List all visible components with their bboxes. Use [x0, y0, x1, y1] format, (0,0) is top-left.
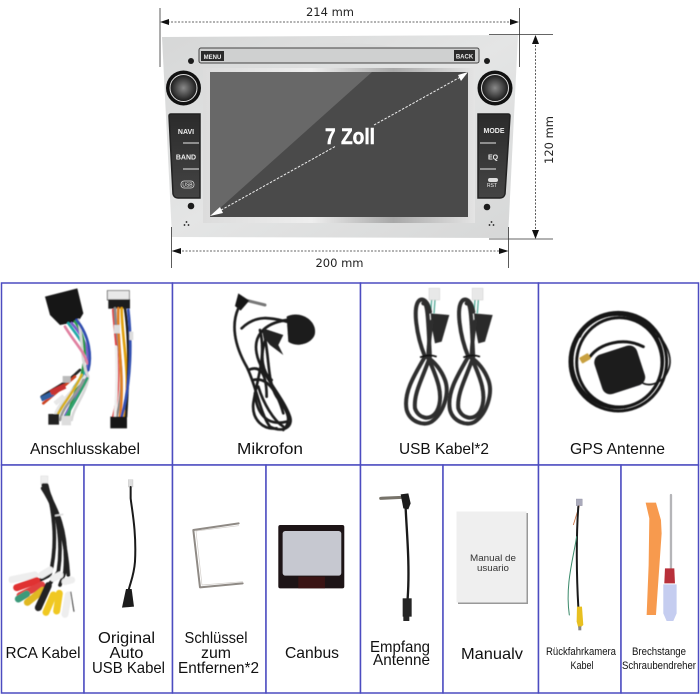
- left button panel: USB: [182, 182, 193, 188]
- screen: [210, 72, 468, 217]
- icon: RCA cable: [12, 476, 74, 614]
- icon: receiver antenna adapter: [381, 493, 412, 621]
- label: Entfernen*2: [178, 660, 259, 677]
- icon: canbus module: [278, 525, 344, 588]
- label: RCA Kabel: [6, 645, 80, 662]
- panel: Brechstange Schraubendreher: [621, 465, 698, 693]
- icon: user manual: Manual de: [470, 553, 516, 564]
- left button panel: NAVI: [178, 129, 194, 136]
- screw holes: [184, 58, 494, 226]
- label: Brechstange: [632, 646, 686, 658]
- panel: Schlüssel zum Entfernen: [172, 465, 266, 693]
- label: [92, 630, 165, 677]
- height dimension 120 mm: 120 mm: [542, 116, 556, 164]
- left button panel: [169, 114, 200, 198]
- panel: Empfang Antenne: [360, 465, 443, 693]
- label: Antenne: [373, 652, 430, 669]
- icon: USB cables: [406, 288, 493, 424]
- label: [546, 646, 617, 672]
- cable 2: [449, 288, 493, 424]
- icon: lavalier microphone: [235, 293, 315, 430]
- panel: Canbus: [266, 465, 360, 693]
- icon: removal key: [193, 523, 243, 587]
- panel: Mikrofon: [172, 283, 360, 465]
- height dimension 120 mm: [489, 34, 556, 239]
- top button strip: BACK: [456, 54, 474, 60]
- left knob: [166, 70, 201, 106]
- label: Canbus: [285, 645, 339, 662]
- icon: wiring harness: [40, 288, 133, 428]
- panel: RCA Kabel: [2, 465, 84, 693]
- right button panel: MODE: [484, 128, 505, 135]
- panel: Manualv: [443, 465, 538, 693]
- width dimension 200 mm: [172, 227, 508, 270]
- label: Mikrofon: [237, 441, 303, 458]
- head unit dimensions drawing: [160, 5, 556, 270]
- car radio front panel: [162, 35, 518, 238]
- right button panel: [478, 114, 510, 198]
- label: [622, 646, 696, 672]
- label: Auto: [110, 645, 144, 662]
- panel: Original Auto USB Kabel: [84, 465, 172, 693]
- panel: Rückfahrkamera Kabel: [538, 465, 621, 693]
- label: [370, 639, 430, 669]
- width dimension 214 mm: [160, 5, 520, 67]
- icon: GPS antenna: [570, 312, 670, 411]
- label: Schlüssel: [184, 630, 248, 647]
- panel: Anschlusskabel: [2, 283, 172, 465]
- cable 1: [406, 288, 449, 424]
- icon: user manual: [456, 512, 528, 604]
- top button strip: MENU: [204, 55, 221, 61]
- icon: reverse camera cable: [568, 499, 583, 630]
- right knob: [478, 70, 512, 106]
- screen size label: 7 Zoll: [325, 124, 375, 149]
- label: zum: [201, 645, 231, 662]
- icon: user manual: usuario: [477, 563, 509, 574]
- label: USB Kabel*2: [399, 441, 489, 458]
- screen bezel: [203, 68, 475, 223]
- icon: original USB cable: [122, 480, 135, 608]
- label: [178, 630, 259, 677]
- panel: USB Kabel*2: [360, 283, 538, 465]
- right button panel: EQ: [488, 154, 499, 162]
- label: Anschlusskabel: [30, 441, 140, 458]
- label: Original: [98, 630, 155, 647]
- label: Kabel: [570, 660, 594, 672]
- label: Rückfahrkamera: [546, 646, 617, 658]
- width dimension 214 mm: 214 mm: [306, 5, 354, 19]
- icon: pry tool and screwdriver: [646, 495, 677, 621]
- left button panel: BAND: [176, 154, 196, 162]
- label: Manualv: [461, 646, 523, 663]
- screen reflection: [210, 72, 372, 217]
- top button strip: [199, 48, 479, 63]
- label: GPS Antenne: [570, 441, 665, 458]
- width dimension 200 mm: 200 mm: [315, 256, 364, 270]
- label: USB Kabel: [92, 660, 165, 677]
- right button panel: RST: [487, 183, 497, 189]
- screen diagonal arrow: [210, 72, 468, 216]
- label: Empfang: [370, 639, 430, 656]
- panel: GPS Antenne: [538, 283, 698, 465]
